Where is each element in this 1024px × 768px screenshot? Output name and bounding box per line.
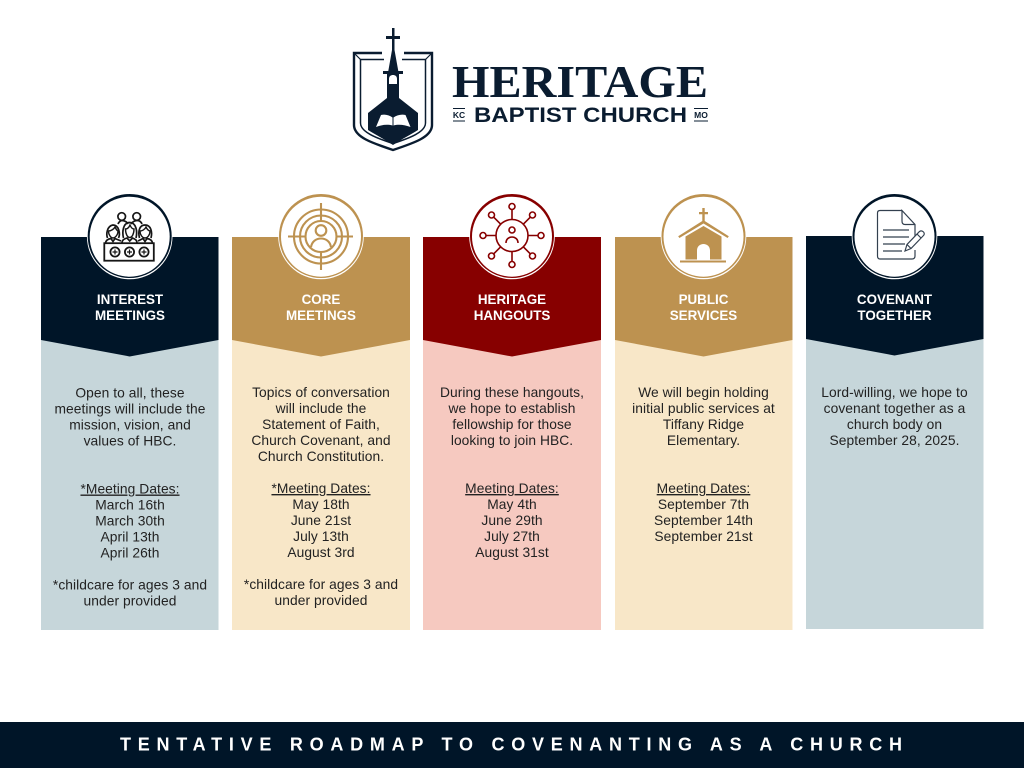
text block: meeting dates: April 13th (101, 530, 159, 544)
text block: meeting dates: September 21st (654, 529, 753, 544)
text block: meeting dates: March 30th (95, 514, 165, 528)
header banner (41, 237, 218, 356)
text block: description: initial public services at (632, 401, 775, 416)
text block: description: Open to all, these (75, 386, 185, 400)
text block: meeting dates: May 18th (292, 497, 350, 512)
footer title: TENTATIVE ROADMAP TO COVENANTING AS A CHURCH (120, 734, 902, 754)
heading: MEETINGS (95, 308, 165, 323)
icon: people at a table (87, 194, 172, 279)
text block: childcare note: under provided (84, 594, 176, 608)
text block: meeting dates: *Meeting Dates: (80, 482, 180, 496)
heading: COVENANT (857, 292, 933, 307)
icon: document and pencil (852, 194, 937, 279)
footer banner (0, 722, 1024, 768)
text block: description: Church Covenant, and (251, 433, 391, 448)
text block: description: Lord-willing, we hope to (821, 385, 968, 400)
text block: meeting dates: April 26th (101, 546, 159, 560)
text block: meeting dates: May 4th (487, 497, 537, 512)
logo: Heritage Baptist Church (354, 28, 708, 150)
heading: PUBLIC (679, 292, 729, 307)
icon: chapel with cross (661, 194, 746, 279)
text block: meeting dates: March 16th (95, 498, 165, 512)
text block: description: We will begin holding (638, 385, 769, 400)
header banner (615, 237, 792, 356)
panel: interest meetings (41, 194, 218, 630)
text block: childcare note: under provided (275, 593, 367, 608)
header banner (423, 237, 601, 356)
text block: childcare note: *childcare for ages 3 and (53, 578, 207, 592)
header banner (806, 236, 984, 356)
text block: description: September 28, 2025. (829, 433, 960, 448)
text block: description: covenant together as a (824, 401, 966, 416)
header banner (232, 237, 410, 356)
text block: description: Tiffany Ridge (663, 417, 744, 432)
icon: target with person (278, 194, 364, 279)
heading: MEETINGS (286, 308, 356, 323)
heading: SERVICES (670, 308, 737, 323)
panel: covenant together (806, 194, 984, 629)
text block: meeting dates: *Meeting Dates: (271, 481, 371, 496)
text block: description: Statement of Faith, (262, 417, 380, 432)
heading: TOGETHER (857, 308, 932, 323)
text block: description: will include the (275, 401, 367, 416)
text block: description: Church Constitution. (258, 449, 384, 464)
heading: HERITAGE (478, 292, 546, 307)
text block: meeting dates: June 21st (291, 513, 351, 528)
text block: description: During these hangouts, (440, 385, 584, 400)
heading: CORE (302, 292, 340, 307)
text block: meeting dates: July 27th (484, 529, 540, 544)
heading: INTEREST (97, 292, 164, 307)
panel: heritage hangouts (423, 194, 601, 630)
text block: description: fellowship for those (452, 417, 572, 432)
wordmark: MO: MO (694, 110, 708, 120)
text block: meeting dates: July 13th (293, 529, 349, 544)
text block: meeting dates: August 3rd (287, 545, 355, 560)
text block: childcare note: *childcare for ages 3 and (244, 577, 398, 592)
text block: description: church body on (847, 417, 942, 432)
text block: meeting dates: June 29th (481, 513, 543, 528)
icon: network around person (469, 194, 555, 279)
text block: description: Topics of conversation (252, 385, 390, 400)
text block: description: looking to join HBC. (451, 433, 573, 448)
panel: public services (615, 194, 792, 630)
heading: HANGOUTS (474, 308, 550, 323)
text block: description: we hope to establish (448, 401, 576, 416)
text block: meeting dates: September 14th (654, 513, 753, 528)
text block: description: Elementary. (667, 433, 740, 448)
text block: meeting dates: September 7th (658, 497, 749, 512)
icon: shield with church steeple (354, 28, 432, 150)
wordmark: HERITAGE: HERITAGE (452, 56, 708, 107)
wordmark: KC: KC (453, 110, 465, 120)
text block: description: mission, vision, and (69, 418, 191, 432)
panel: core meetings (232, 194, 410, 630)
wordmark: BAPTIST CHURCH: BAPTIST CHURCH (474, 103, 687, 127)
text block: meeting dates: Meeting Dates: (657, 481, 750, 496)
text block: description: meetings will include the (54, 402, 206, 416)
text block: meeting dates: August 31st (475, 545, 549, 560)
text block: description: values of HBC. (84, 434, 176, 448)
text block: meeting dates: Meeting Dates: (465, 481, 559, 496)
